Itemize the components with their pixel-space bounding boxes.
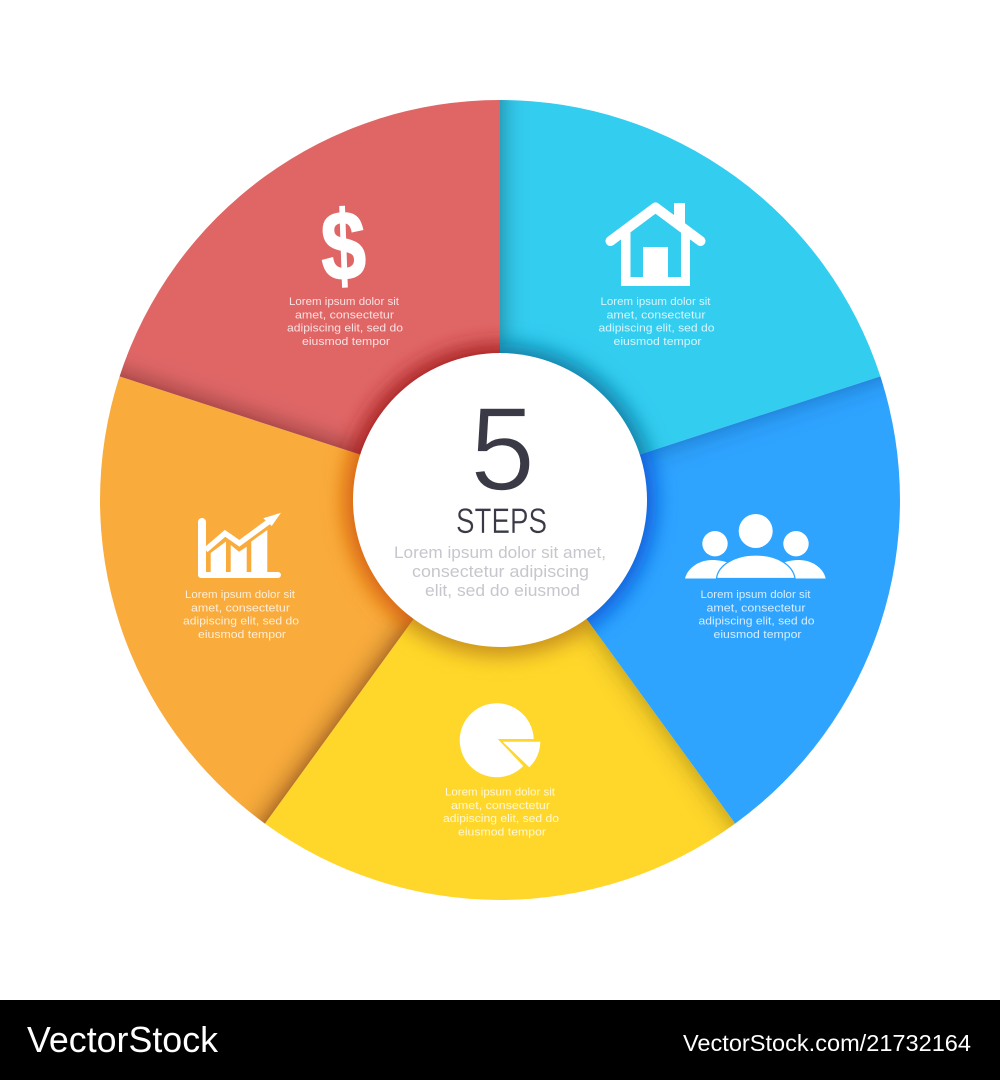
text block: center description: Lorem ipsum dolor sit amet,	[394, 543, 606, 562]
icon: dollar sign: $	[319, 190, 367, 301]
panel: orange segment with growth chart	[100, 376, 414, 824]
footer bar	[0, 1000, 1000, 1080]
panel: yellow segment with pie chart	[265, 618, 736, 900]
text block: red segment: adipiscing elit, sed do	[287, 322, 403, 334]
text block: center description: consectetur adipiscing	[412, 562, 589, 581]
text block: cyan segment: Lorem ipsum dolor sit	[600, 296, 710, 308]
text block: center description	[394, 543, 606, 600]
heading: STEPS: STEPS	[456, 502, 547, 541]
text block: yellow segment	[443, 786, 559, 838]
panel: cyan segment with house	[500, 100, 880, 454]
text block: cyan segment	[598, 296, 714, 348]
text block: blue segment: amet, consectetur	[706, 602, 806, 614]
text block: red segment: eiusmod tempor	[302, 336, 390, 348]
text block: cyan segment: amet, consectetur	[606, 310, 706, 322]
icon: growth chart	[198, 513, 281, 578]
text block: orange segment: eiusmod tempor	[198, 629, 286, 641]
text block: red segment: Lorem ipsum dolor sit	[289, 296, 399, 308]
text block: blue segment	[698, 589, 814, 641]
text block: blue segment: Lorem ipsum dolor sit	[700, 589, 810, 601]
text block: orange segment: amet, consectetur	[191, 602, 290, 614]
text block: cyan segment: adipiscing elit, sed do	[598, 322, 714, 334]
text block: orange segment: adipiscing elit, sed do	[183, 616, 299, 628]
panel: blue segment with people	[586, 376, 900, 824]
text block: blue segment: eiusmod tempor	[714, 629, 802, 641]
text block: red segment	[287, 296, 403, 348]
icon: people	[685, 514, 826, 578]
icon: house	[610, 203, 700, 286]
text block: orange segment	[183, 589, 299, 641]
footer url text: VectorStock.com/21732164	[683, 1030, 971, 1056]
text block: cyan segment: eiusmod tempor	[614, 336, 702, 348]
text block: orange segment: Lorem ipsum dolor sit	[185, 589, 295, 601]
text block: yellow segment: amet, consectetur	[451, 800, 550, 812]
text block: blue segment: adipiscing elit, sed do	[698, 616, 814, 628]
icon: pie chart	[460, 703, 540, 777]
panel: center circle	[353, 353, 647, 647]
text block: yellow segment: eiusmod tempor	[458, 826, 546, 838]
text block: center description: elit, sed do eiusmod	[425, 581, 580, 600]
text block: yellow segment: Lorem ipsum dolor sit	[445, 786, 555, 798]
panel: red segment with dollar	[120, 100, 500, 454]
number 5: 5	[470, 383, 535, 516]
text block: red segment: amet, consectetur	[295, 310, 394, 322]
footer logo text: VectorStock	[27, 1019, 219, 1060]
text block: yellow segment: adipiscing elit, sed do	[443, 813, 559, 825]
